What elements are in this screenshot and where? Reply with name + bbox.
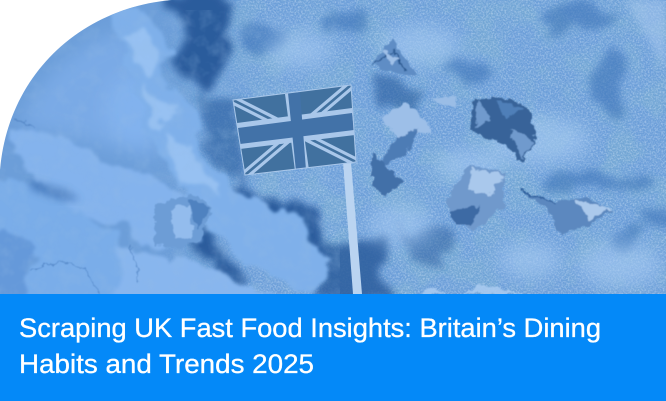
chips xyxy=(0,4,328,300)
herb flakes on the batter xyxy=(372,40,612,235)
chip: bottom left xyxy=(0,178,122,294)
chip: middle crossing xyxy=(6,128,205,246)
title banner xyxy=(0,294,666,401)
photo: fish and chips with British flag, blue duotone xyxy=(0,0,666,300)
chip flake xyxy=(155,193,212,247)
shadow patches on the batter xyxy=(241,4,666,243)
plate highlight on the left xyxy=(27,36,156,155)
bright patches on the batter xyxy=(268,25,662,287)
title text xyxy=(19,313,601,379)
photo base tone xyxy=(0,0,666,294)
dark crevices in the fish xyxy=(160,0,450,300)
chip: long diagonal xyxy=(108,4,328,290)
herb: right xyxy=(522,191,612,235)
bottom edge light fragments xyxy=(418,284,525,294)
flag: Union Jack xyxy=(233,85,356,175)
shadow between chips xyxy=(28,180,80,200)
herb: lower center xyxy=(445,165,505,232)
herb: small flake xyxy=(431,96,458,106)
chip crack lines xyxy=(14,118,140,294)
chip: highlights xyxy=(118,26,218,198)
plate patch lower left xyxy=(0,228,34,300)
title text: Scraping UK Fast Food Insights: Britain’s Dining xyxy=(19,313,601,343)
battered fish texture xyxy=(150,0,666,294)
herb: center left xyxy=(372,104,432,197)
chip surface texture xyxy=(0,10,340,294)
herb: top cluster xyxy=(372,40,418,76)
top-right background glimmer xyxy=(626,0,666,65)
herb: center dark xyxy=(470,97,535,163)
chip: lower fragment xyxy=(114,247,272,294)
title text: Habits and Trends 2025 xyxy=(19,349,314,379)
flag stick xyxy=(343,162,362,294)
